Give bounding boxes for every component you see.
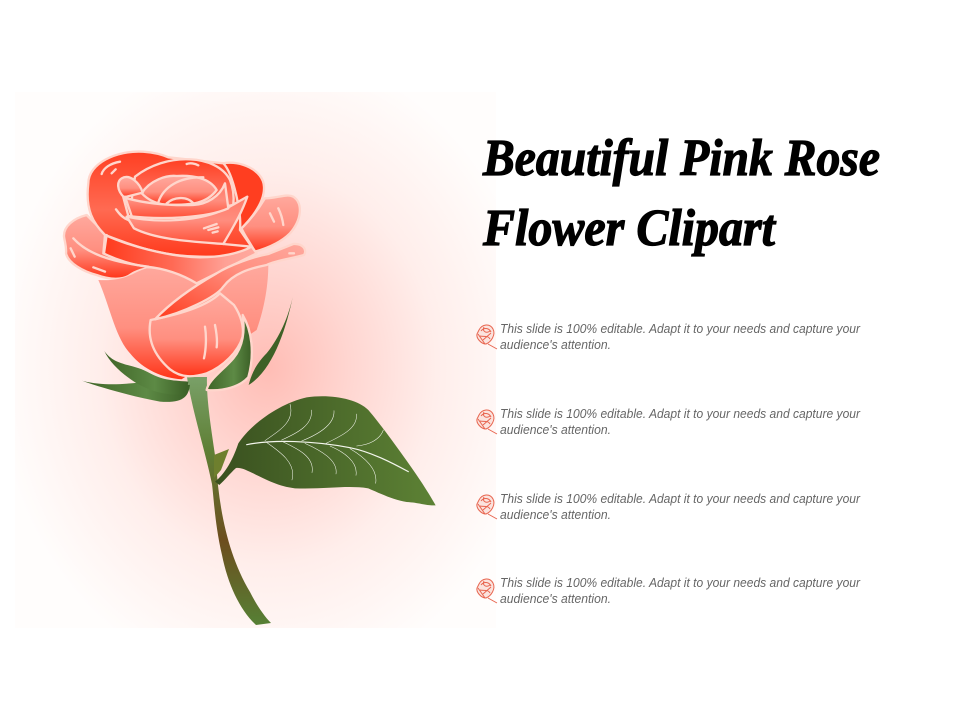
sepal: far right xyxy=(249,297,293,385)
petal: front fold xyxy=(155,244,305,319)
petal: center top xyxy=(132,159,234,217)
title: Flower Clipart xyxy=(482,200,776,257)
list item 2: This slide is 100% editable. Adapt it to your needs and capture your xyxy=(500,406,861,421)
petal: inner cup xyxy=(123,183,228,218)
sepal: far left xyxy=(82,380,190,402)
icon: small rose xyxy=(477,325,497,349)
icon: small rose xyxy=(477,410,497,434)
petal: far right xyxy=(242,196,300,252)
title: Beautiful Pink Rose xyxy=(482,130,880,187)
petal lines and highlights xyxy=(71,162,294,358)
list item 1 xyxy=(477,321,861,352)
list item 2 xyxy=(477,406,861,437)
petal: inner spiral xyxy=(142,176,217,205)
sepal: right xyxy=(207,315,252,390)
bud: front xyxy=(150,293,243,376)
band: wrap petal xyxy=(103,235,257,283)
petal: knob xyxy=(118,177,143,197)
list item 4 xyxy=(477,575,861,606)
stem xyxy=(187,377,271,625)
list item 3: This slide is 100% editable. Adapt it to your needs and capture your xyxy=(500,491,861,506)
rose head and sepals xyxy=(64,152,305,402)
list item 2: audience's attention. xyxy=(500,422,611,437)
illustration: rose xyxy=(64,152,436,625)
leaf veins xyxy=(247,404,408,483)
petal: upper head xyxy=(88,152,255,257)
leaf xyxy=(215,396,436,505)
list item 1: audience's attention. xyxy=(500,337,611,352)
icon: small rose xyxy=(477,495,497,519)
icon: thorn xyxy=(214,449,229,478)
list item 1: This slide is 100% editable. Adapt it to your needs and capture your xyxy=(500,321,861,336)
list item 4: This slide is 100% editable. Adapt it to your needs and capture your xyxy=(500,575,861,590)
list item 3 xyxy=(477,491,861,522)
petal: right back xyxy=(217,163,264,252)
cup xyxy=(98,265,268,379)
list item 3: audience's attention. xyxy=(500,507,611,522)
list item 4: audience's attention. xyxy=(500,591,611,606)
petal: mid band xyxy=(127,197,247,244)
icon: small rose xyxy=(477,579,497,603)
sepal: upper left xyxy=(104,351,188,395)
panel: pink glow background xyxy=(15,92,496,628)
title xyxy=(482,130,880,257)
petal: left xyxy=(64,215,153,279)
